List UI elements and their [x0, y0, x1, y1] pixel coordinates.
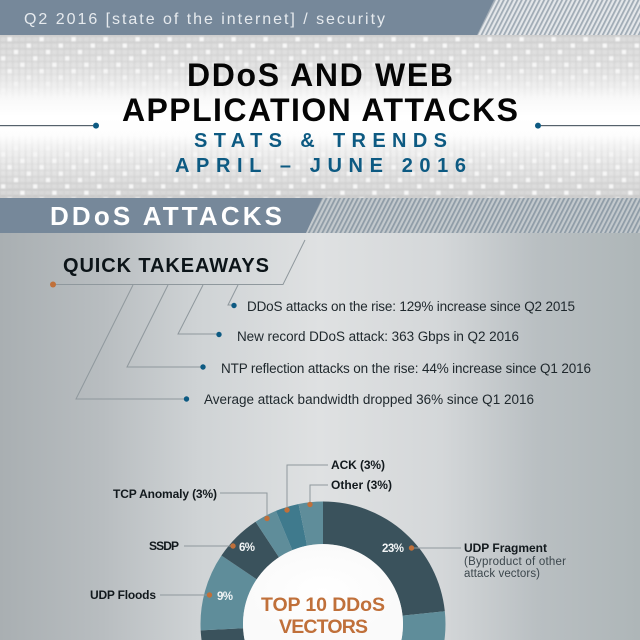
vector labels — [90, 458, 547, 602]
header strip — [0, 0, 640, 35]
takeaway 2: New record DDoS attack: 363 Gbps in Q2 2016 — [237, 329, 519, 344]
donut chart: top 10 DDoS vectors — [90, 458, 566, 640]
vector labels: TCP Anomaly (3%) — [113, 487, 217, 501]
UDP fragment note: attack vectors) — [464, 568, 540, 580]
takeaway 3: NTP reflection attacks on the rise: 44% increase since Q1 2016 — [221, 361, 591, 376]
title banner — [0, 35, 640, 198]
right rule with dot — [535, 123, 640, 129]
section heading band — [0, 198, 640, 233]
segment: lower left vector — [201, 628, 245, 640]
segment: ACK 3% — [276, 504, 307, 550]
donut centre title: TOP 10 DDoS — [261, 594, 385, 616]
segment: SSDP 6% — [221, 522, 279, 579]
leader lines — [160, 465, 461, 595]
vector labels: SSDP — [149, 539, 179, 553]
heading: QUICK TAKEAWAYS — [63, 255, 269, 277]
connector lines — [53, 240, 305, 399]
orange marker — [50, 282, 56, 288]
segment: next vector — [401, 611, 446, 640]
takeaway 1: DDoS attacks on the rise: 129% increase since Q2 2015 — [247, 299, 575, 314]
subtitle: APRIL – JUNE 2016 — [175, 155, 466, 177]
percent labels: 6% — [239, 542, 255, 554]
donut centre — [243, 544, 403, 640]
section heading: DDoS ATTACKS — [50, 201, 282, 231]
segment: Other 3% — [299, 502, 323, 546]
percent labels: 23% — [382, 543, 404, 555]
segment: UDP Fragment 23% — [323, 502, 445, 616]
vector labels: Other (3%) — [331, 478, 392, 492]
header label: Q2 2016 [state of the internet] / security — [24, 11, 385, 28]
UDP fragment note: (Byproduct of other — [464, 556, 566, 568]
segment: UDP Floods 9% — [201, 556, 257, 630]
percent labels — [217, 542, 404, 603]
subtitle: STATS & TRENDS — [194, 130, 447, 152]
donut centre title — [261, 594, 385, 638]
main title: APPLICATION ATTACKS — [122, 92, 518, 128]
vector labels: ACK (3%) — [331, 458, 385, 472]
marker dots — [207, 502, 414, 598]
percent labels: 9% — [217, 591, 233, 603]
subtitle — [175, 130, 466, 177]
quick takeaways block — [50, 240, 591, 407]
donut centre title: VECTORS — [279, 616, 368, 638]
takeaway 4: Average attack bandwidth dropped 36% since Q1 2016 — [204, 392, 534, 407]
UDP fragment note — [464, 556, 566, 580]
vector labels: UDP Floods — [90, 588, 156, 602]
vector labels: UDP Fragment — [464, 541, 547, 555]
panel: DDoS attacks background — [0, 233, 640, 640]
left rule with dot — [0, 123, 99, 129]
main title: DDoS AND WEB — [187, 57, 453, 93]
segment: TCP Anomaly 3% — [256, 511, 292, 557]
main title — [122, 57, 518, 128]
